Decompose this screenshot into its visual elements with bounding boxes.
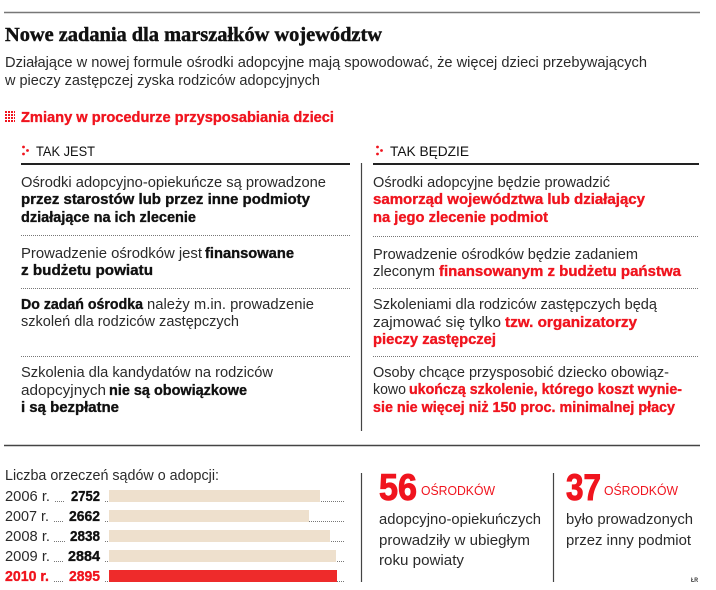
item: obowiazkowe szkolenie: ukończą szkolenie, którego koszt wynie- <box>409 382 682 398</box>
chart heading: Liczba orzeczeń sądów o adopcji: <box>5 468 219 484</box>
row: 2010: 2010 r. <box>5 569 49 585</box>
icon: dot grid <box>5 112 15 121</box>
item: prowadzenie osrodkow: działające na ich zlecenie <box>21 210 196 226</box>
item: organizatorzy <box>373 297 658 348</box>
item: szkolenia: adopcyjnych <box>21 383 106 399</box>
row: 2009 <box>5 549 344 565</box>
row: 2006: 2006 r. <box>5 489 50 505</box>
item: finansowanie: Prowadzenie ośrodków jest <box>21 246 202 262</box>
stat: 56 osrodkow: adopcyjno-opiekuńczych <box>379 512 541 528</box>
item: finansowanie: z budżetu powiatu <box>21 263 153 279</box>
title: Nowe zadania dla marszałków województw <box>5 24 383 46</box>
section heading: Zmiany w procedurze przysposabiania dzieci <box>21 109 334 126</box>
item: samorzad: Ośrodki adopcyjne będzie prowadzić <box>373 175 610 191</box>
item: obowiazkowe szkolenie: kowo <box>373 382 406 398</box>
item: organizatorzy: pieczy zastępczej <box>373 332 496 348</box>
panel: tak jest <box>21 143 350 416</box>
item: prowadzenie osrodkow <box>21 175 326 226</box>
stat: 56 osrodkow <box>379 467 541 569</box>
intro text <box>4 54 647 89</box>
stat: 37 osrodkow: przez inny podmiot <box>566 533 691 549</box>
stat: 56 osrodkow: roku powiaty <box>379 553 465 569</box>
row: 2007: 2007 r. <box>5 509 49 525</box>
item: samorzad: na jego zlecenie podmiot <box>373 210 548 226</box>
row: 2008 <box>5 529 344 545</box>
item: szkolenia <box>21 365 274 416</box>
bar chart: liczba orzeczen <box>5 468 344 585</box>
item: finansowanie <box>21 246 294 279</box>
stat: 56 osrodkow: 56 <box>379 467 417 508</box>
stat: 56 osrodkow: prowadziły w ubiegłym <box>379 533 530 549</box>
column heading: tak jest: TAK JEST <box>36 143 95 159</box>
row: 2006 <box>5 489 344 505</box>
item: obowiazkowe szkolenie: sie nie więcej niż 150 proc. minimalnej płacy <box>373 400 675 416</box>
item: szkolenia: nie są obowiązkowe <box>109 383 247 399</box>
item: finansowanie: finansowane <box>205 246 294 262</box>
item: zadania osrodka: należy m.in. prowadzenie <box>147 297 314 313</box>
item: organizatorzy: Szkoleniami dla rodziców zastępczych będą <box>373 297 658 313</box>
item: obowiazkowe szkolenie <box>373 365 682 416</box>
stat: 37 osrodkow: 37 <box>566 467 601 508</box>
item: organizatorzy: tzw. organizatorzy <box>505 315 637 331</box>
item: budzet panstwa <box>373 247 682 280</box>
column heading: tak bedzie: TAK BĘDZIE <box>390 143 469 159</box>
item: samorzad <box>373 175 645 226</box>
row: 2008: 2008 r. <box>5 529 50 545</box>
row: 2008: 2838 <box>70 529 100 545</box>
item: prowadzenie osrodkow: przez starostów lub przez inne podmioty <box>21 192 310 208</box>
row: 2007 <box>5 509 344 525</box>
item: samorzad: samorząd województwa lub działający <box>373 192 645 208</box>
row: 2010: 2895 <box>69 569 100 585</box>
item: organizatorzy: zajmować się tylko <box>373 315 501 331</box>
item: budzet panstwa: finansowanym z budżetu państwa <box>439 264 682 280</box>
item: budzet panstwa: Prowadzenie ośrodków będzie zadaniem <box>373 247 638 263</box>
stat: 37 osrodkow: OŚRODKÓW <box>604 483 679 498</box>
stat: 56 osrodkow: OŚRODKÓW <box>421 483 496 498</box>
item: zadania osrodka: Do zadań ośrodka <box>21 297 144 313</box>
item: zadania osrodka <box>21 297 314 330</box>
item: szkolenia: Szkolenia dla kandydatów na rodziców <box>21 365 274 381</box>
panel: tak bedzie <box>373 143 699 416</box>
credit: ŁR <box>691 578 699 584</box>
stat: 37 osrodkow <box>566 467 693 549</box>
item: budzet panstwa: zleconym <box>373 264 435 280</box>
row: 2007: 2662 <box>69 509 100 525</box>
row: 2006: 2752 <box>71 489 100 505</box>
row: 2010 <box>5 569 344 585</box>
stat: 37 osrodkow: było prowadzonych <box>566 512 693 528</box>
item: szkolenia: i są bezpłatne <box>21 400 119 416</box>
intro text: Działające w nowej formule ośrodki adopcyjne mają spowodować, że więcej dzieci przebywających <box>5 54 647 71</box>
item: zadania osrodka: szkoleń dla rodziców zastępczych <box>21 314 239 330</box>
item: obowiazkowe szkolenie: Osoby chcące przysposobić dziecko obowiąz- <box>373 365 669 381</box>
item: prowadzenie osrodkow: Ośrodki adopcyjno-opiekuńcze są prowadzone <box>21 175 326 191</box>
row: 2009: 2009 r. <box>5 549 50 565</box>
intro text: w pieczy zastępczej zyska rodziców adopcyjnych <box>4 72 320 89</box>
row: 2009: 2884 <box>68 549 100 565</box>
